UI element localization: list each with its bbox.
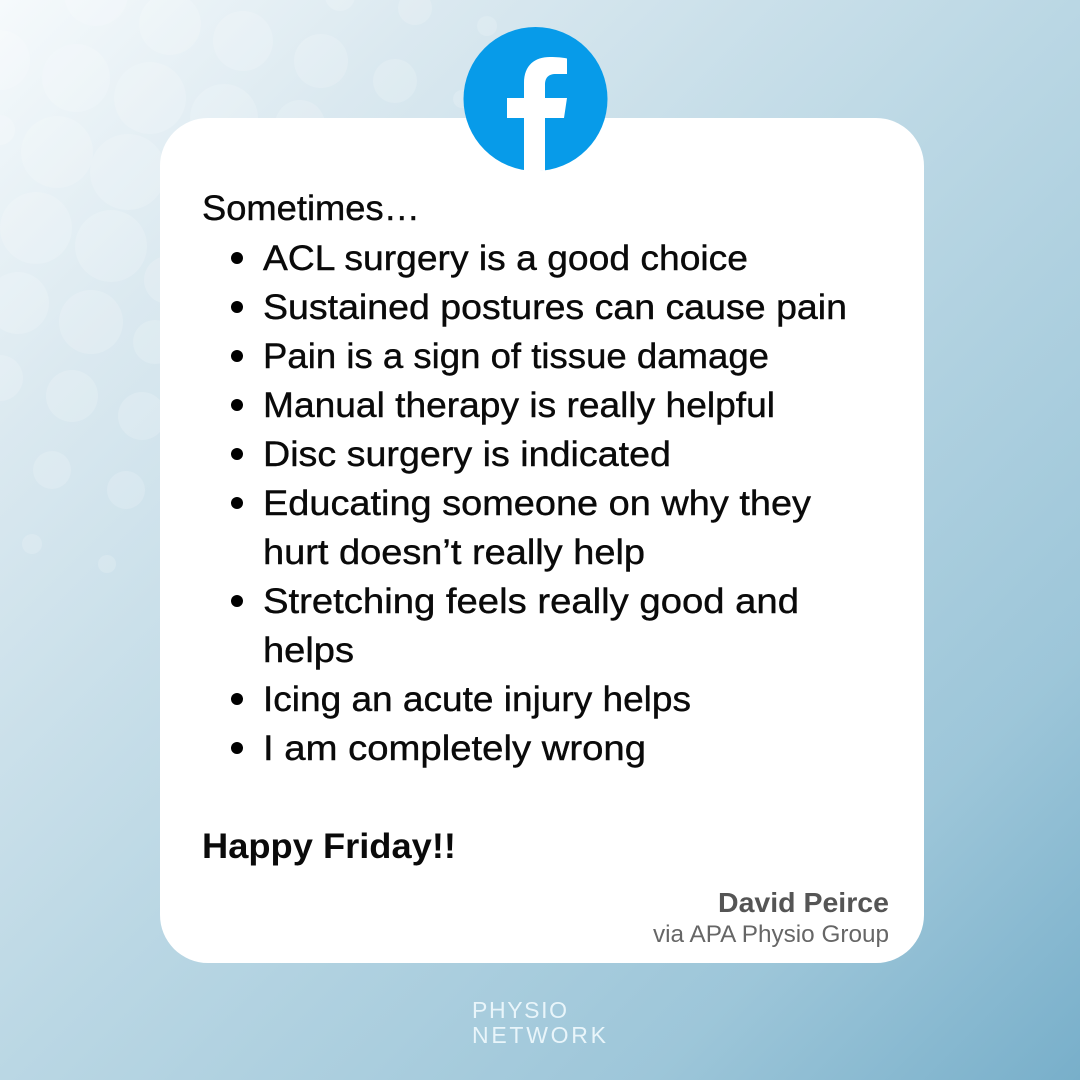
list item: manual therapy: Manual therapy is really helpful (263, 386, 775, 425)
list item: educating: Educating someone on why they (263, 484, 812, 523)
card background (160, 118, 924, 963)
list item: educating (231, 484, 812, 572)
list item: disc surgery: Disc surgery is indicated (263, 435, 671, 474)
list item: stretching: Stretching feels really good and (263, 582, 799, 621)
list item: sustained postures: Sustained postures can cause pain (263, 288, 847, 327)
background bubbles (0, 0, 497, 573)
panel: white card (160, 118, 924, 963)
list item: pain: Pain is a sign of tissue damage (263, 337, 769, 376)
logo: Physio Network (472, 997, 607, 1048)
logo: Physio Network: PHYSIO (472, 997, 567, 1023)
intro line: Sometimes… (202, 189, 420, 228)
list item: ACL surgery: ACL surgery is a good choice (263, 239, 748, 278)
list item: stretching: helps (263, 631, 354, 670)
logo: Physio Network: NETWORK (472, 1022, 607, 1048)
author name: David Peirce (718, 887, 889, 918)
list item: stretching (231, 582, 799, 670)
attribution (653, 887, 889, 948)
list item: icing: Icing an acute injury helps (263, 680, 691, 719)
list item: educating: hurt doesn’t really help (263, 533, 645, 572)
sign-off: Happy Friday!! (202, 827, 456, 866)
source: via APA Physio Group (653, 921, 889, 948)
bullet list (231, 239, 847, 768)
icon: facebook logo (464, 27, 608, 171)
list item: completely wrong: I am completely wrong (263, 729, 646, 768)
